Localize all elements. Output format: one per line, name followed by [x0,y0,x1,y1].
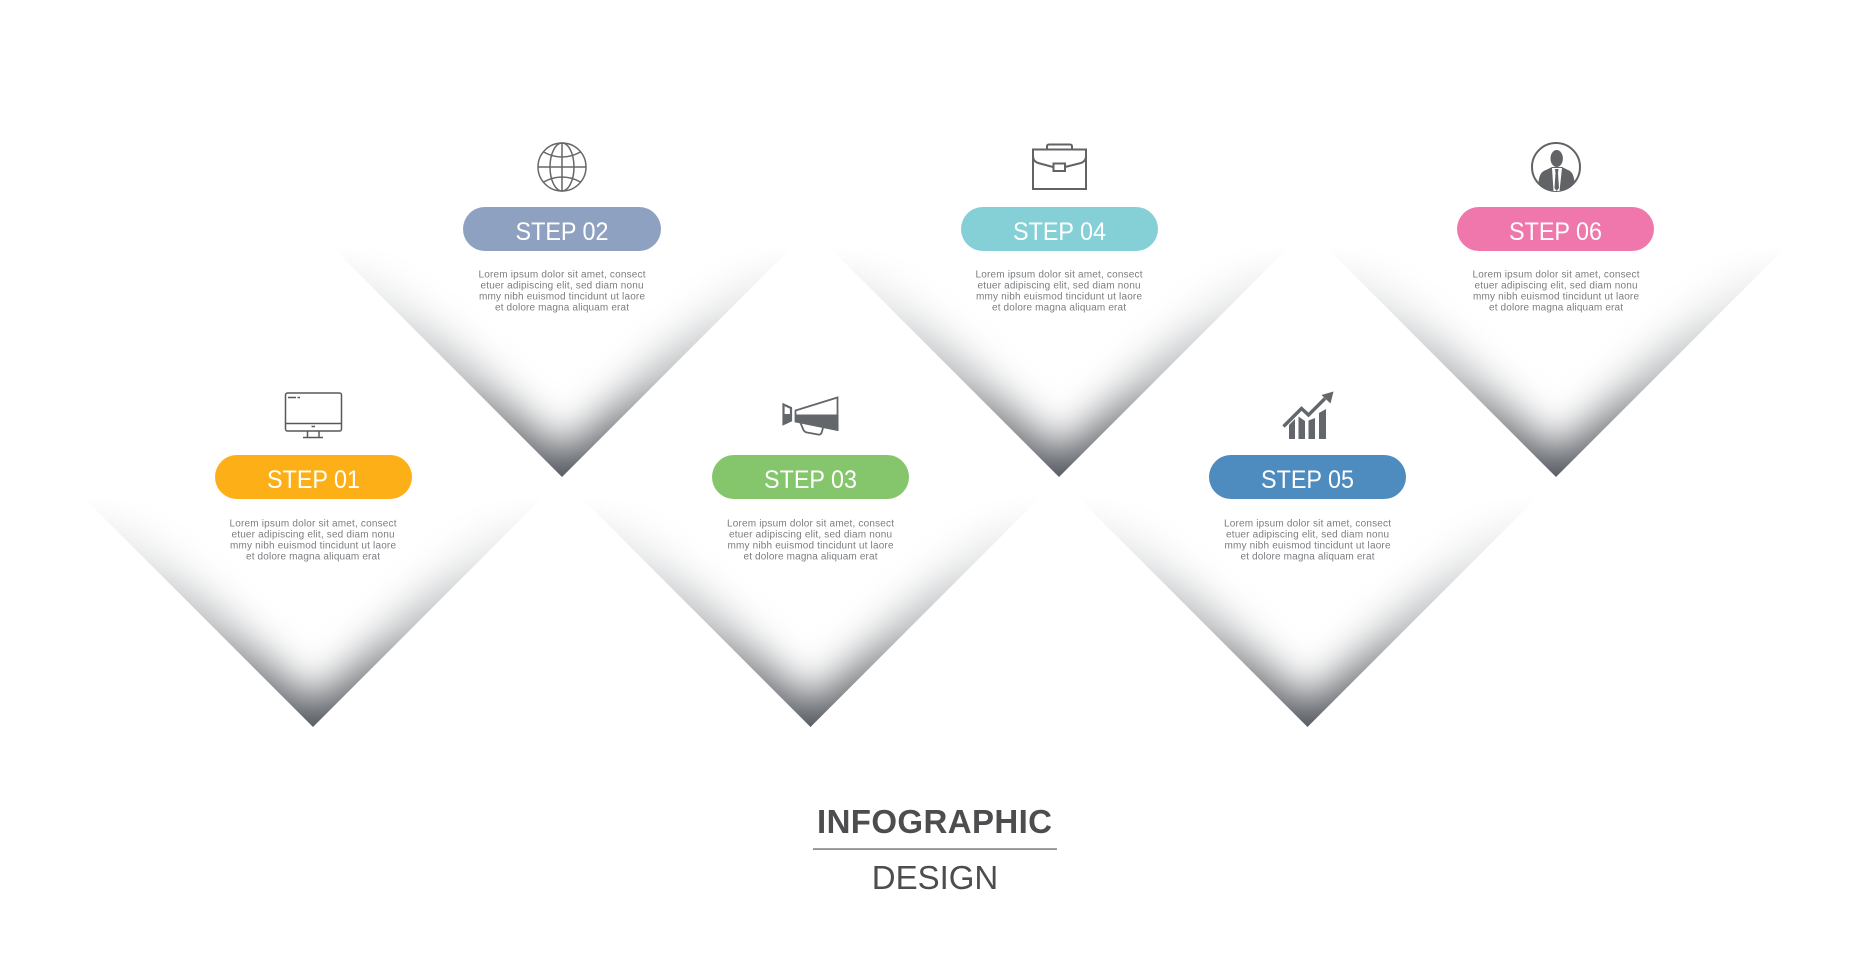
shadow wedge [212,102,912,477]
description: et dolore magna aliquam erat [246,552,380,562]
description [1472,270,1640,314]
icon: monitor [286,393,342,438]
description: etuer adipiscing elit, sed diam nonu [1474,280,1638,292]
title: infographic design [813,803,1057,896]
icon: globe [538,143,586,191]
step label: STEP 05 [1261,466,1354,494]
icon: businessman [1532,143,1580,191]
step label [961,207,1158,251]
description: etuer adipiscing elit, sed diam nonu [232,530,394,540]
step label: STEP 04 [1013,218,1106,246]
step label: STEP 01 [267,466,360,494]
description: et dolore magna aliquam erat [1489,302,1623,314]
description [478,270,646,314]
icon: briefcase [1033,144,1086,189]
description: et dolore magna aliquam erat [1240,552,1375,562]
icon: megaphone [783,398,838,435]
description: mmy nibh euismod tincidunt ut laore [976,292,1142,302]
step label: STEP 06 [1509,218,1602,246]
description: Lorem ipsum dolor sit amet, consect [727,518,894,530]
description [727,518,894,562]
description: Lorem ipsum dolor sit amet, consect [1224,518,1391,530]
description: Lorem ipsum dolor sit amet, consect [1472,270,1640,280]
shadow wedge [0,352,663,727]
subheading: DESIGN [872,859,998,896]
description: mmy nibh euismod tincidunt ut laore [1473,292,1639,302]
shadow wedge [709,102,1409,477]
step label [1457,207,1654,251]
description: et dolore magna aliquam erat [992,302,1126,314]
description: Lorem ipsum dolor sit amet, consect [478,270,646,280]
shadow wedge [1206,102,1861,477]
description: mmy nibh euismod tincidunt ut laore [1224,540,1391,552]
divider [813,848,1057,850]
description: et dolore magna aliquam erat [744,552,878,562]
description: Lorem ipsum dolor sit amet, consect [230,518,397,530]
description: mmy nibh euismod tincidunt ut laore [479,292,645,302]
description [1224,518,1391,562]
description [976,270,1143,314]
panel: step 06 [1206,102,1861,477]
step label [215,455,412,499]
panel: step 02 [212,102,912,477]
shadow wedge [958,352,1658,727]
description: et dolore magna aliquam erat [495,302,629,314]
step label [463,207,661,251]
step label: STEP 03 [764,466,857,494]
heading: INFOGRAPHIC [817,803,1052,840]
description: etuer adipiscing elit, sed diam nonu [1226,530,1389,540]
step label: STEP 02 [516,218,608,246]
panel: step 05 [958,352,1658,727]
step label [712,455,909,499]
step label [1209,455,1406,499]
panel: step 03 [460,352,1160,727]
description: mmy nibh euismod tincidunt ut laore [230,540,396,552]
description: Lorem ipsum dolor sit amet, consect [976,270,1143,280]
description: etuer adipiscing elit, sed diam nonu [480,280,644,292]
description: mmy nibh euismod tincidunt ut laore [728,540,894,552]
description: etuer adipiscing elit, sed diam nonu [978,280,1140,292]
description [230,518,397,562]
description: etuer adipiscing elit, sed diam nonu [729,530,892,540]
panel: step 01 [0,352,663,727]
shadow wedge [460,352,1160,727]
icon: growth chart [1284,392,1334,439]
panel: step 04 [709,102,1409,477]
